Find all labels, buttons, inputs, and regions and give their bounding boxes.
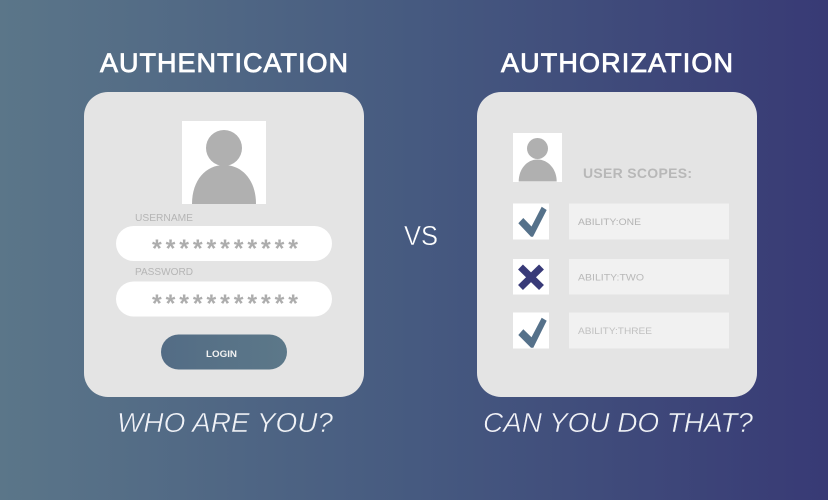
row: ability two denied: ABILITY:TWO (578, 272, 644, 284)
label: username: USERNAME (135, 213, 193, 224)
row: ability one allowed (513, 204, 729, 240)
row: ability three allowed (513, 312, 729, 348)
heading: authorization: AUTHORIZATION (501, 48, 733, 78)
panel: authorization scopes card (477, 92, 757, 397)
input: username field (116, 226, 332, 263)
caption: who are you: WHO ARE YOU? (117, 407, 333, 438)
vs label: VS (404, 220, 438, 251)
row: ability two denied (513, 259, 729, 294)
icon: user avatar (182, 121, 266, 204)
caption: can you do that: CAN YOU DO THAT? (483, 407, 753, 438)
label: user scopes: USER SCOPES: (583, 165, 692, 181)
heading: authentication: AUTHENTICATION (100, 48, 348, 78)
input: password field: *********** (152, 290, 298, 318)
label: password: PASSWORD (135, 267, 193, 278)
input: username field: *********** (152, 235, 298, 263)
button: login: LOGIN (206, 349, 237, 359)
row: ability one allowed: ABILITY:ONE (578, 217, 641, 228)
button: login (161, 334, 287, 370)
panel: authentication login card (84, 92, 364, 397)
input: password field (116, 282, 332, 318)
icon: user avatar small (513, 133, 562, 182)
row: ability three allowed: ABILITY:THREE (578, 326, 652, 337)
